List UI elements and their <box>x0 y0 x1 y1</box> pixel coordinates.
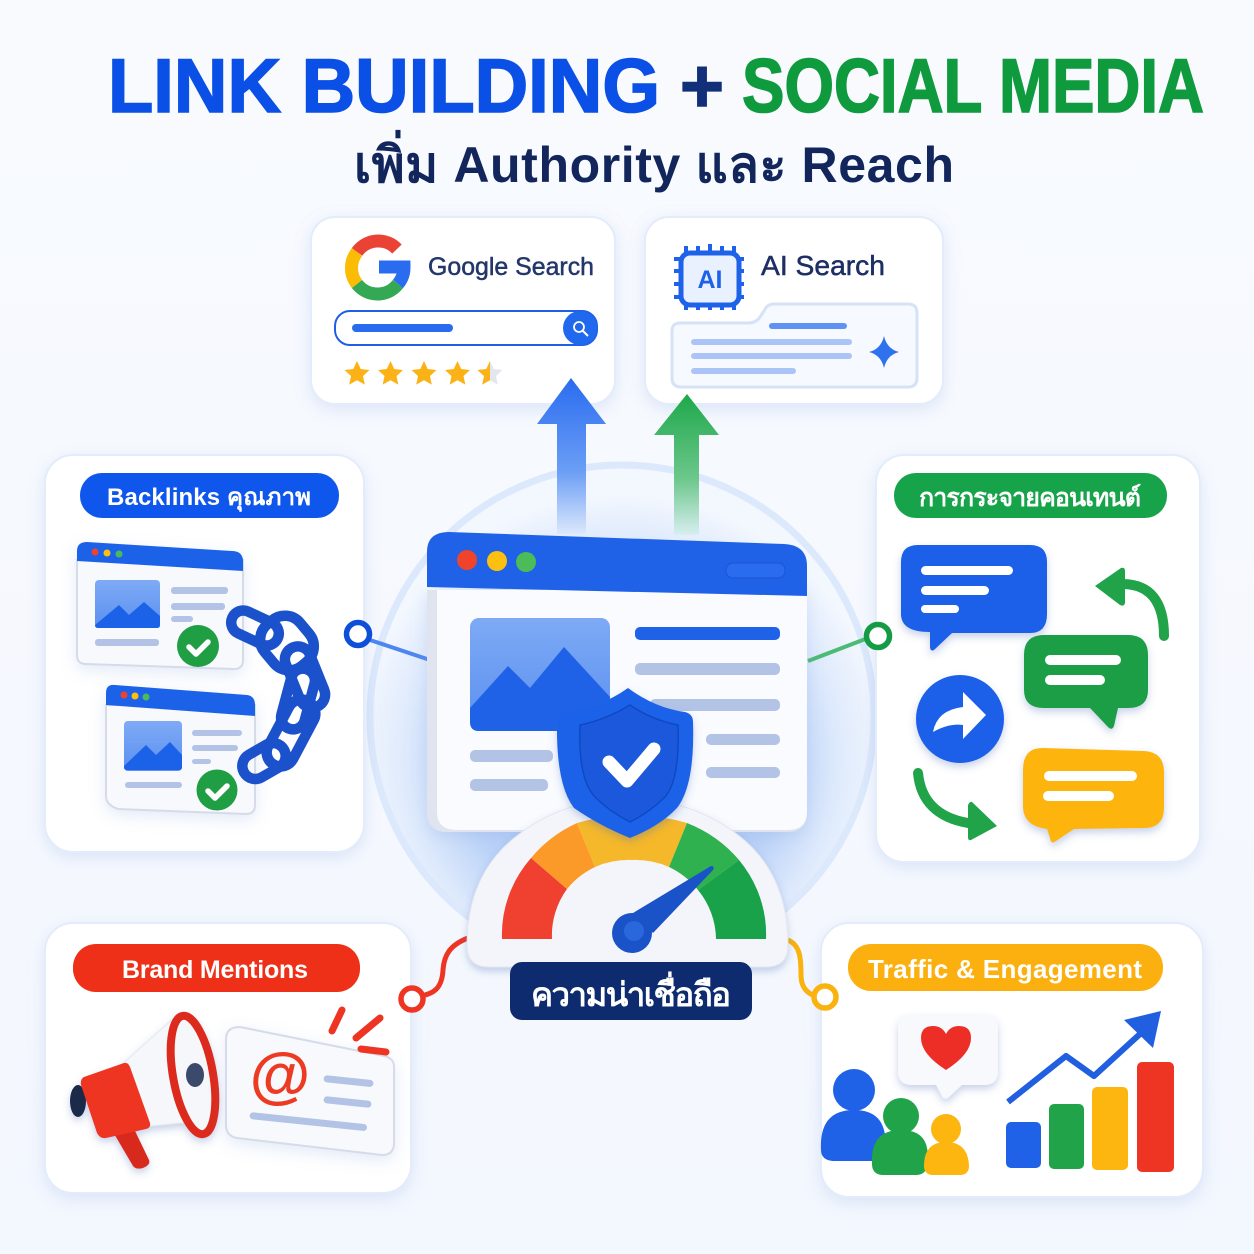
icon: megaphone <box>70 1012 223 1169</box>
pill: Traffic <box>848 944 1163 991</box>
gauge <box>467 799 788 967</box>
title: + <box>680 44 724 129</box>
pill: Brand Mentions: Brand Mentions <box>122 956 308 984</box>
connector: green <box>808 624 890 661</box>
title <box>108 44 1204 129</box>
email card <box>226 1027 394 1155</box>
blue bubble <box>901 545 1047 650</box>
check badge 2 <box>196 770 238 810</box>
image placeholder <box>470 618 610 731</box>
pill: Backlinks <box>80 473 339 518</box>
panel: AI Search <box>645 217 943 404</box>
yellow bubble <box>1023 748 1164 842</box>
pill: Traffic: Traffic & Engagement <box>868 954 1142 984</box>
star rating <box>344 361 502 385</box>
AI answer card <box>672 304 917 387</box>
mini browser 1 <box>77 542 243 669</box>
check badge 1 <box>177 625 219 667</box>
panel: Brand Mentions <box>45 923 411 1193</box>
mini browser 2 <box>106 685 255 814</box>
bar chart <box>1006 1062 1174 1172</box>
arrow: green up <box>654 394 719 535</box>
heart bubble <box>898 1015 998 1099</box>
icon: AI chip: AI <box>698 266 722 294</box>
label: Google Search: Google Search <box>428 253 594 281</box>
arrow: blue up <box>537 378 606 534</box>
icon: Google G <box>351 241 404 294</box>
pill: Backlinks: Backlinks คุณภาพ <box>107 484 311 513</box>
pill: Brand Mentions <box>73 944 360 992</box>
title: LINK BUILDING <box>108 44 660 129</box>
panel: Google Search <box>311 217 615 404</box>
connector: blue <box>346 622 430 660</box>
panel: Traffic & Engagement <box>821 923 1203 1197</box>
main browser window <box>427 532 807 832</box>
email card: @ <box>250 1041 310 1110</box>
share circle <box>916 675 1004 763</box>
shield <box>557 688 693 838</box>
pill: content distribution: การกระจายคอนเทนต์ <box>919 483 1141 512</box>
green arrow: forward <box>918 773 997 840</box>
green bubble <box>1024 635 1148 729</box>
icon: AI chip <box>674 244 744 310</box>
central halo ring <box>370 465 874 969</box>
pill: content distribution <box>894 473 1167 518</box>
subtitle: เพิ่ม Authority และ Reach <box>354 130 954 193</box>
gauge arcs <box>502 816 766 939</box>
gauge needle <box>612 866 714 953</box>
alert sparks <box>332 1010 386 1052</box>
credibility label <box>510 962 752 1020</box>
panel: Content distribution <box>876 455 1200 862</box>
label: AI Search: AI Search <box>761 250 885 281</box>
icon: chain <box>227 607 329 784</box>
credibility label: ความน่าเชื่อถือ <box>531 971 731 1013</box>
connector: yellow <box>788 940 836 1008</box>
growth arrow <box>1008 1011 1161 1102</box>
search bar <box>335 311 597 345</box>
connector: red <box>401 938 468 1010</box>
green arrow: back <box>1095 568 1164 636</box>
panel: Backlinks <box>45 455 364 852</box>
people <box>821 1069 969 1175</box>
